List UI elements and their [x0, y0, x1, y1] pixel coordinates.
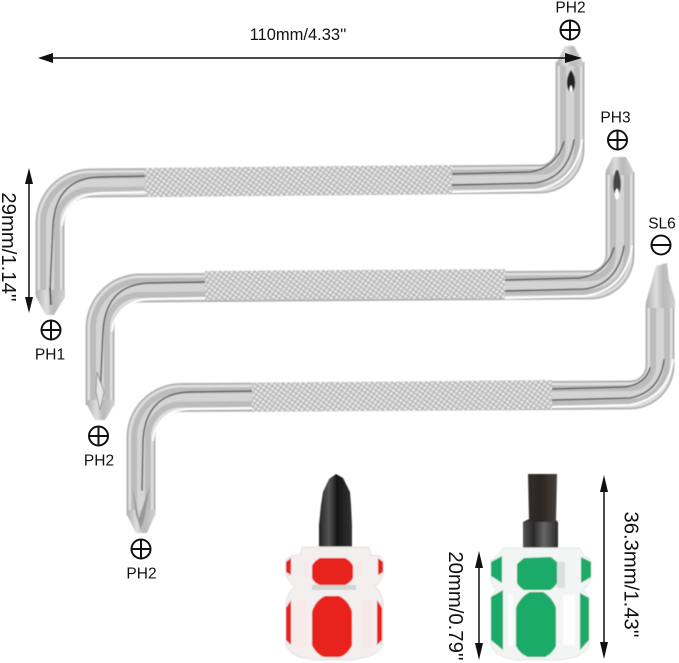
- tip label: top PH2: [555, 0, 586, 40]
- clear handle: [286, 547, 383, 660]
- handle shadow band: [312, 585, 356, 590]
- tip: PH2 lower left: [87, 372, 114, 420]
- tip label: middle PH2: PH2: [84, 452, 114, 470]
- tip label: PH1: PH1: [35, 346, 65, 364]
- knurled grip 2: [205, 269, 505, 300]
- knurled grip 3: [252, 380, 552, 412]
- width label: 110mm/4.33'': [250, 26, 346, 44]
- short height arrow: [475, 551, 483, 660]
- leg height arrow: [25, 168, 33, 313]
- tip: PH2 upper: [557, 46, 583, 93]
- shaft 2: [100, 172, 632, 405]
- shaft 3: [141, 304, 673, 515]
- tip label: middle PH2: [84, 426, 114, 470]
- tip label: PH1: [35, 320, 65, 364]
- shaft 1: [50, 62, 582, 295]
- tip label: PH3: [600, 110, 631, 150]
- tip label: SL6: SL6: [648, 216, 676, 232]
- pale side facets: [508, 595, 575, 645]
- knurled grip 1: [145, 165, 452, 197]
- tip: PH3: [606, 157, 633, 200]
- total height label: 36.3mm/1.43'': [620, 511, 642, 638]
- green grip panels: [491, 556, 591, 657]
- wrench 3: PH2 and SL6: [127, 263, 675, 533]
- tip label: bottom PH2: PH2: [126, 566, 157, 582]
- dark slotted blade: [523, 474, 558, 548]
- tip label: top PH2: PH2: [555, 0, 586, 16]
- stubby screwdriver: red Phillips: [286, 474, 383, 660]
- tip: SL6 flat blade: [646, 263, 675, 308]
- stubby screwdriver: green slotted: [491, 474, 591, 660]
- width dimension arrow: [38, 53, 582, 63]
- red grip panels: [286, 558, 383, 657]
- total height arrow: [600, 475, 608, 659]
- black Phillips bit: [319, 474, 352, 547]
- tip: PH1: [36, 288, 65, 315]
- handle inner shaft reflection: [557, 562, 565, 588]
- tip label: bottom PH2: [126, 540, 157, 582]
- clear handle: [491, 548, 591, 660]
- wrench 1: PH1 and PH2: [36, 46, 583, 315]
- pale side facets: [293, 562, 373, 648]
- wrench 2: PH2 and PH3: [87, 157, 633, 420]
- tip: PH2 bottom: [127, 485, 155, 533]
- tip label: PH3: PH3: [600, 110, 631, 126]
- tip label: SL6: [648, 216, 676, 254]
- short height label: 20mm/0.79'': [444, 551, 466, 661]
